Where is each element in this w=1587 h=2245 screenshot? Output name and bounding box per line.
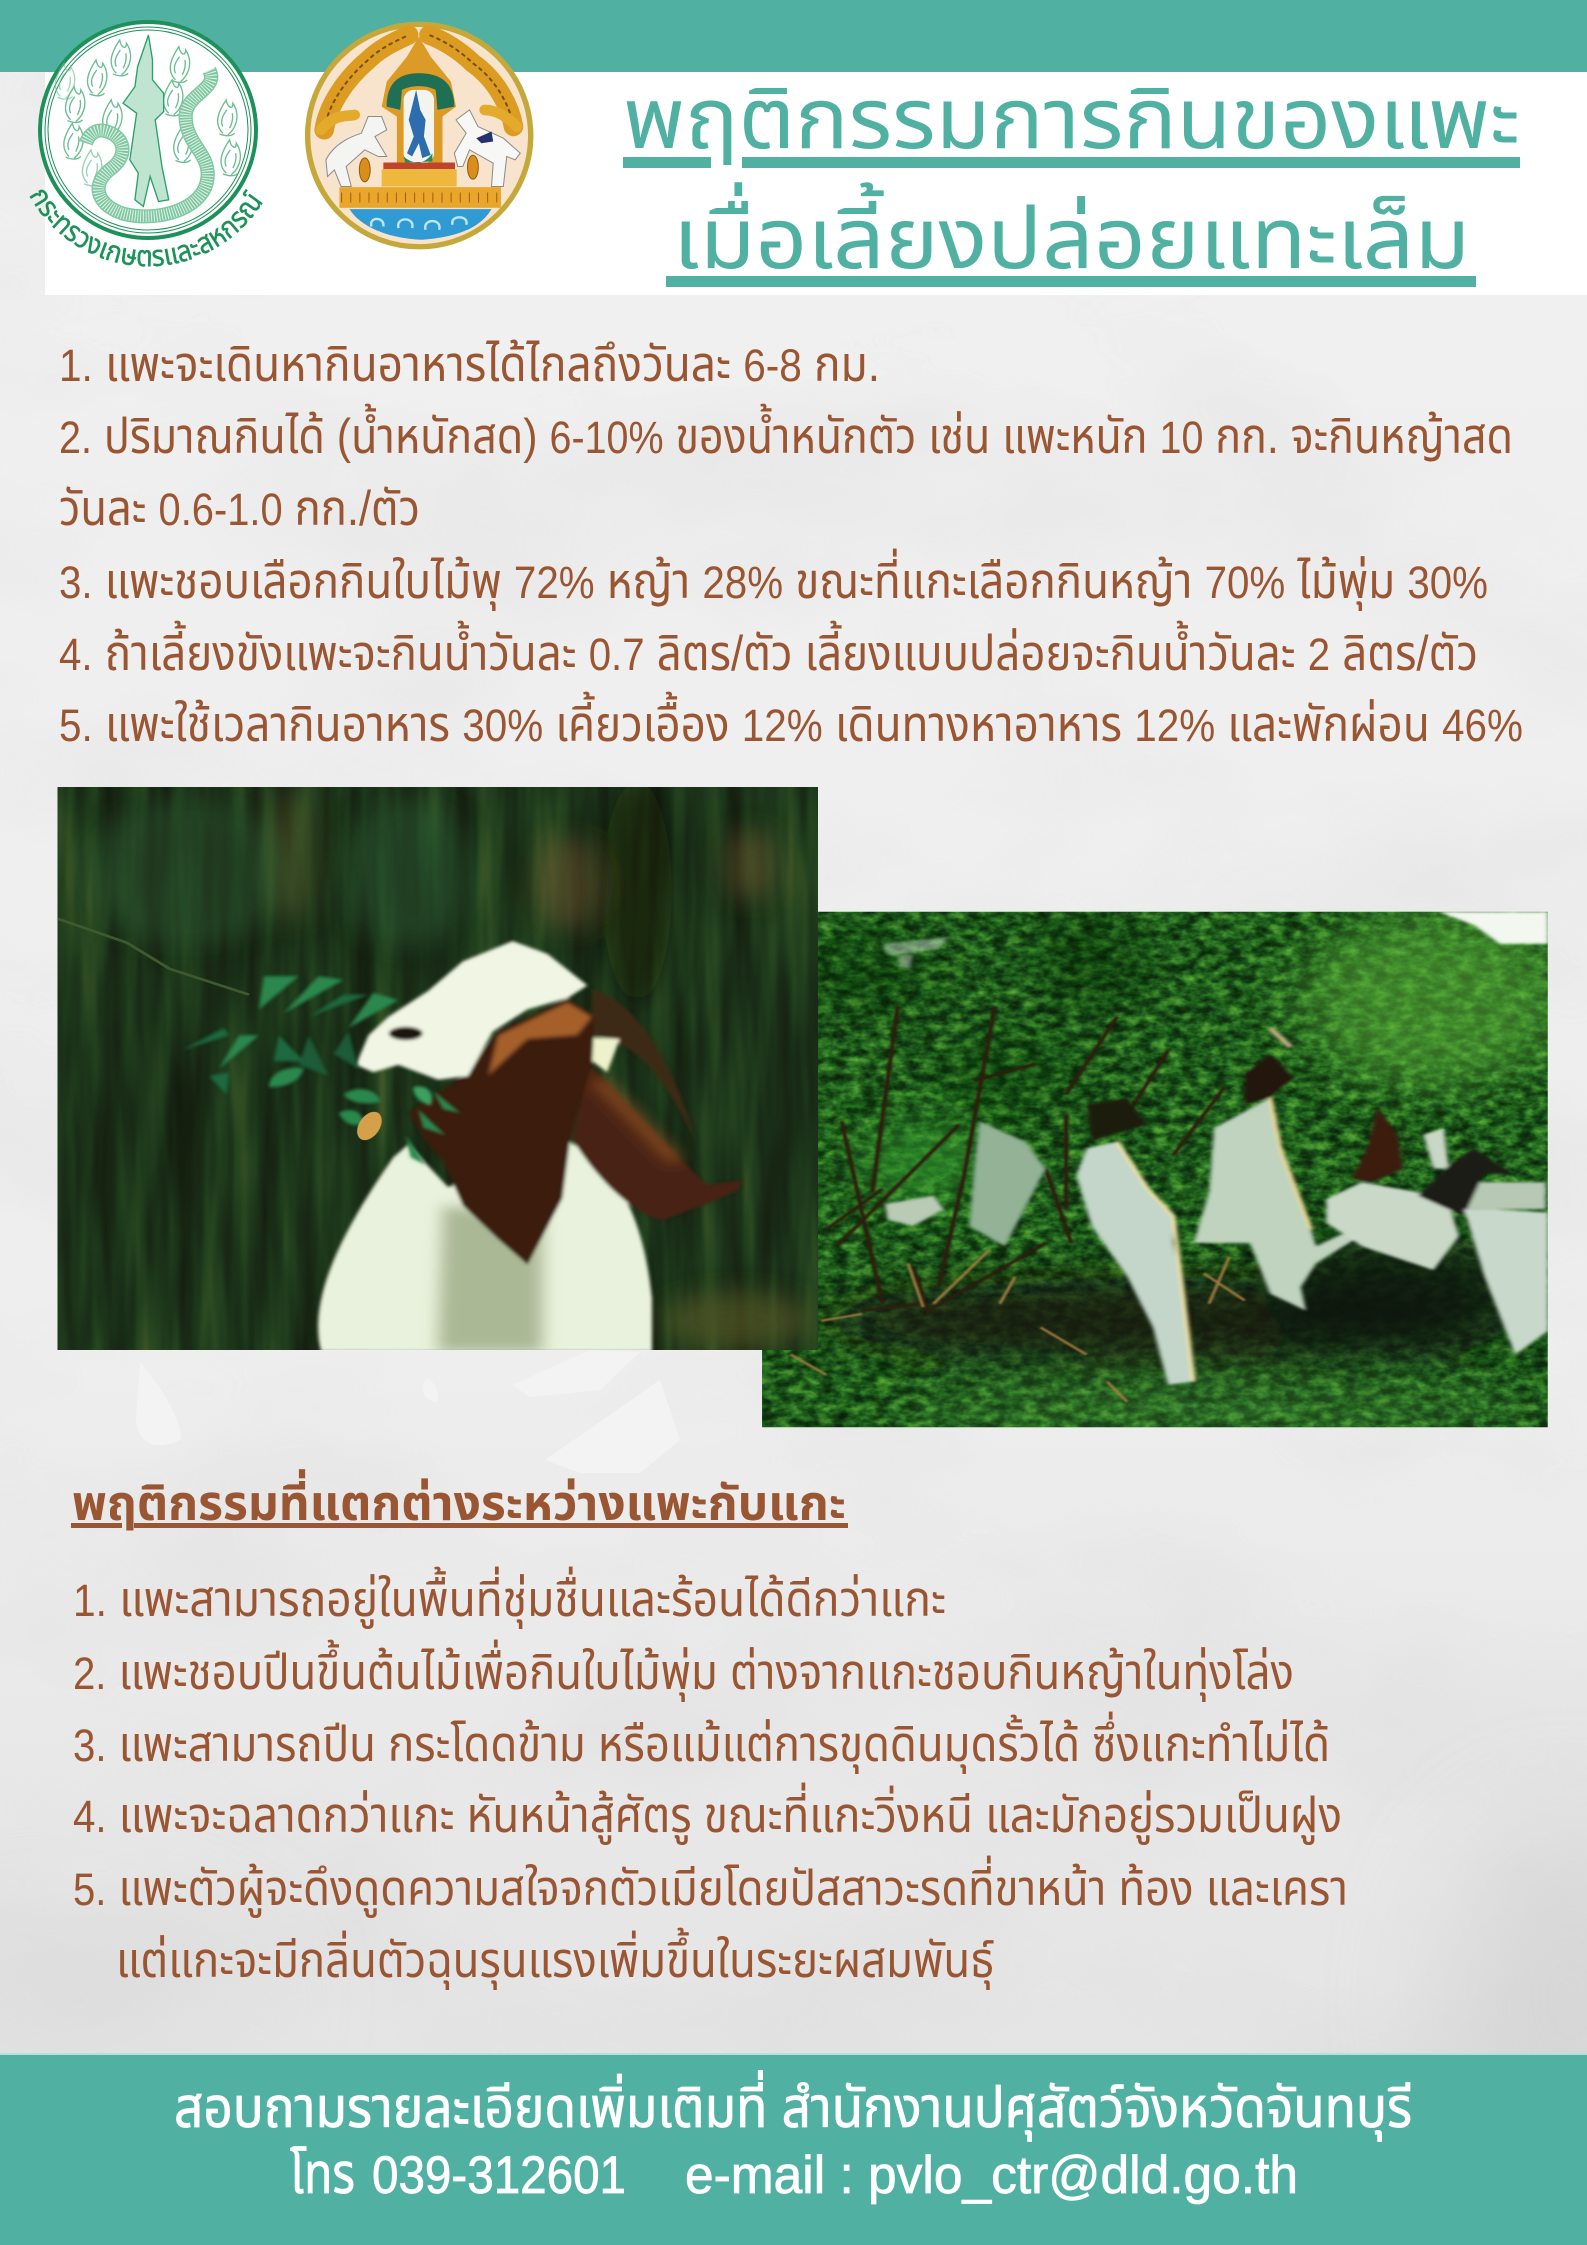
naga (86, 70, 211, 216)
photo: goats browsing in shrubs (760, 905, 1566, 1432)
footer contact line 1: สอบถามรายละเอียดเพิ่มเติมที่ สำนักงานปศุสัตว์จังหวัดจันทบุรี (174, 2070, 1412, 2141)
list: differences: 5. แพะตัวผู้จะดึงดูดความสใจจกตัวเมียโดยปัสสาวะรดที่ขาหน้า ท้อง และเครา (73, 1855, 1348, 1918)
title panel (45, 72, 1587, 295)
white ear patch (590, 1037, 620, 1072)
header band (0, 0, 1587, 72)
horn (592, 989, 697, 1143)
list: differences: 2. แพะชอบปีนขึ้นต้นไม้เพื่อกินใบไม้พุ่ม ต่างจากแกะชอบกินหญ้าในทุ่งโล่ง (73, 1639, 1294, 1702)
heading: differences between goats and sheep: พฤติกรรมที่แตกต่างระหว่างแพะกับแกะ (72, 1469, 846, 1531)
title underline 2 (666, 276, 1476, 287)
title underline 1 (623, 157, 1520, 168)
list: eating behaviour: 2. ปริมาณกินได้ (น้ำหนักสด) 6-10% ของน้ำหนักตัว เช่น แพะหนัก 10 กก. จะกินหญ้าสด (59, 403, 1513, 464)
logo: livestock department seal (308, 24, 531, 247)
gold flourishes (321, 35, 517, 130)
list: eating behaviour: 4. ถ้าเลี้ยงขังแพะจะกินน้ำวันละ 0.7 ลิตร/ตัว เลี้ยงแบบปล่อยจะกินน้ำวันละ 2 ลิตร/ตัว (59, 620, 1478, 681)
footer contact line 2 (290, 2142, 1298, 2205)
neck and head (408, 998, 595, 1265)
list: eating behaviour (59, 338, 1523, 752)
list: eating behaviour: วันละ 0.6-1.0 กก./ตัว (59, 482, 420, 536)
horse right (454, 110, 520, 186)
twig (58, 919, 249, 995)
goat group (885, 1028, 1548, 1385)
sky (1439, 912, 1548, 944)
deity figure (407, 90, 431, 158)
list: eating behaviour: 1. แพะจะเดินหากินอาหารได้ไกลถึงวันละ 6-8 กม. (59, 338, 880, 392)
photo: goat eating leaves (50, 780, 826, 1357)
yellow leaf (352, 1109, 386, 1143)
water (350, 209, 492, 240)
list: differences: 4. แพะจะฉลาดกว่าแกะ หันหน้าสู้ศัตรู ขณะที่แกะวิ่งหนี และมักอยู่รวมเป็นฝูง (73, 1782, 1342, 1845)
highlights in canopy (882, 937, 949, 968)
leaves (182, 976, 460, 1165)
shrine (382, 37, 456, 163)
list: differences: แต่แกะจะมีกลิ่นตัวฉุนรุนแรงเพิ่มขึ้นในระยะผสมพันธุ์ (116, 1927, 994, 1990)
footer band (0, 2053, 1587, 2245)
footer contact line 2: 039-312601 (372, 2146, 626, 2205)
scale band (339, 187, 501, 208)
goat (318, 941, 742, 1352)
list: eating behaviour: 3. แพะชอบเลือกกินใบไม้พุ 72% หญ้า 28% ขณะที่แกะเลือกกินหญ้า 70% ไม้พุ่ม 30% (59, 548, 1488, 611)
logo: ministry of agriculture seal (30, 20, 263, 267)
ministry name on arc: กระทรวงเกษตรและสหกรณ์ (30, 188, 263, 267)
list: eating behaviour: 5. แพะใช้เวลากินอาหาร 30% เคี้ยวเอื้อง 12% เดินทางหาอาหาร 12% และพักผ่อน 46% (59, 691, 1523, 752)
ornaments (55, 40, 240, 186)
footer contact line 2: โทร (290, 2142, 355, 2205)
dry grass (791, 1250, 1245, 1402)
nostril (389, 1027, 423, 1040)
deity (123, 35, 169, 206)
gold drops (359, 158, 370, 182)
ear (572, 1065, 742, 1220)
branches (826, 1006, 1224, 1314)
list: differences: 3. แพะสามารถปีน กระโดดข้าม หรือแม้แต่การขุดดินมุดรั้วได้ ซึ่งแกะทำไม่ได้ (73, 1711, 1330, 1774)
white face (356, 941, 587, 1080)
footer contact line 2: e-mail : pvlo_ctr@dld.go.th (685, 2146, 1298, 2205)
title line 1: พฤติกรรมการกินของแพะ (623, 72, 1520, 167)
list: differences: 1. แพะสามารถอยู่ในพื้นที่ชุ่มชื่นและร้อนได้ดีกว่าแกะ (73, 1566, 946, 1629)
body (318, 1141, 652, 1352)
list: differences (73, 1566, 1348, 1990)
platform (383, 163, 455, 169)
title line 2: เมื่อเลี้ยงปล่อยแทะเล็ม (673, 182, 1470, 287)
horse left (326, 117, 387, 186)
